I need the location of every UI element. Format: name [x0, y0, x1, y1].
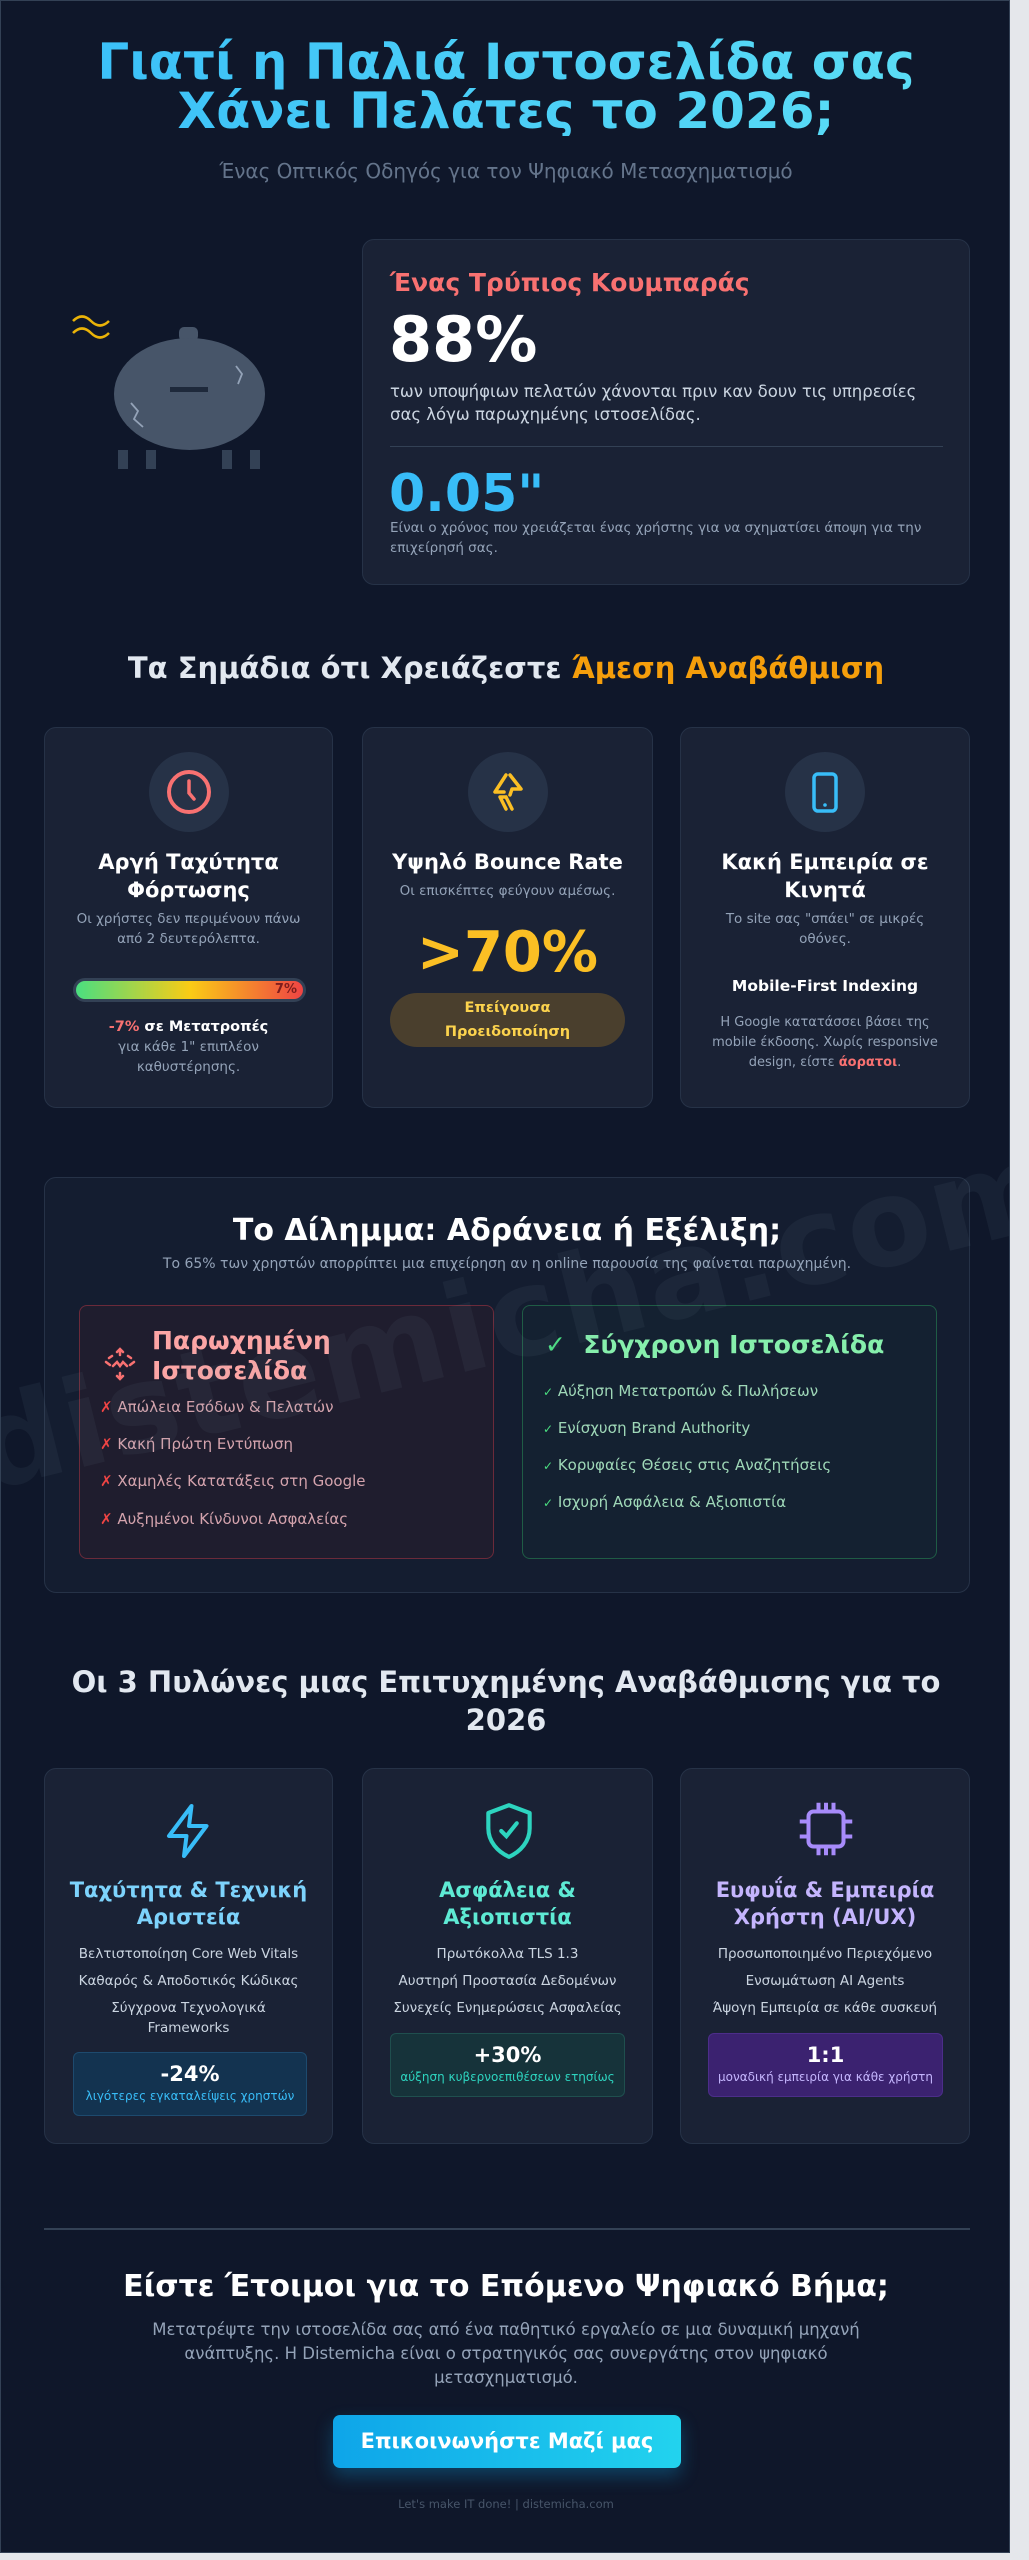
- box title: [152, 1326, 331, 1385]
- icon: phone: [785, 752, 865, 832]
- card text: Οι χρήστες δεν περιμένουν πάνω από 2 δευτερόλεπτα.: [77, 911, 300, 947]
- title: Χάνει Πελάτες το 2026;: [178, 82, 834, 140]
- card text: Το site σας "σπάει" σε μικρές οθόνες.: [726, 911, 924, 947]
- stat: 88%: 88%: [389, 303, 537, 376]
- footer: Let's make IT done! | distemicha.com: [398, 2497, 614, 2511]
- list: negatives: ✗ Χαμηλές Κατατάξεις στη Google: [100, 1472, 366, 1490]
- stat box: +30%: [390, 2033, 625, 2097]
- card title: Φόρτωσης: [127, 878, 250, 902]
- box title: Ιστοσελίδα: [152, 1356, 307, 1385]
- stat: >70%: >70%: [417, 920, 598, 985]
- panel: slow speed: [44, 727, 333, 1108]
- progress bar: 7%: [275, 982, 297, 997]
- list: positives: ✓ Ισχυρή Ασφάλεια & Αξιοπιστία: [543, 1493, 786, 1511]
- panel: security pillar: Συνεχείς Ενημερώσεις Ασφαλείας: [393, 2000, 622, 2016]
- conversion text: για κάθε 1" επιπλέον καθυστέρησης.: [118, 1039, 259, 1075]
- icon: zap: [166, 1804, 209, 1858]
- icon: broken piggy bank: [72, 315, 265, 469]
- pillar title: Αριστεία: [137, 1905, 240, 1929]
- icon: broken bolt: [468, 752, 548, 832]
- panel: AI/UX pillar: [680, 1768, 970, 2144]
- subtext: Το 65% των χρηστών απορρίπτει μια επιχείρηση αν η online παρουσία της φαίνεται παρωχημένη.: [163, 1256, 851, 1272]
- heading: pillars: Οι 3 Πυλώνες μιας Επιτυχημένης Αναβάθμισης για το 2026: [72, 1665, 940, 1737]
- panel: bounce rate: [362, 727, 653, 1108]
- title: [1, 38, 1011, 136]
- pillar title: Ευφυΐα & Εμπειρία: [716, 1878, 934, 1902]
- icon: chip: [800, 1802, 852, 1856]
- badge: urgent warning: [390, 993, 625, 1047]
- badge: urgent warning: Προειδοποίηση: [445, 1024, 570, 1040]
- pillar items: Βελτιστοποίηση Core Web Vitals: [79, 1946, 298, 1962]
- heading: CTA: Είστε Έτοιμοι για το Επόμενο Ψηφιακό Βήμα;: [123, 2269, 889, 2304]
- conversion text: [109, 1019, 268, 1075]
- heading: dilemma: Το Δίλημμα: Αδράνεια ή Εξέλιξη;: [233, 1213, 781, 1248]
- text: 0.05 description: Είναι ο χρόνος που χρειάζεται ένας χρήστης για να σχηματίσει άποψη για την επιχείρησή σας.: [390, 520, 921, 556]
- panel: AI/UX pillar: Άψογη Εμπειρία σε κάθε συσκευή: [713, 2000, 937, 2016]
- panel: mobile: [680, 727, 970, 1108]
- box: modern website: [522, 1305, 937, 1559]
- text: 88% description: των υποψήφιων πελατών χάνονται πριν καν δουν τις υπηρεσίες σας λόγω παρωχημένης ιστοσελίδας.: [390, 382, 916, 424]
- icon: clock: [148, 752, 228, 832]
- pillar items: Προσωποποιημένο Περιεχόμενο: [718, 1946, 932, 1962]
- stat box: 1:1: 1:1: [807, 2043, 844, 2067]
- list: negatives: ✗ Απώλεια Εσόδων & Πελατών: [100, 1398, 334, 1416]
- panel: dilemma: [44, 1177, 970, 1593]
- pillar title: Αξιοπιστία: [443, 1905, 572, 1929]
- stat box: -24%: λιγότερες εγκαταλείψεις χρηστών: [86, 2089, 294, 2103]
- pillar title: [439, 1878, 576, 1929]
- conversion text: -7% σε Μετατροπές: [109, 1019, 268, 1035]
- panel: hero stats: [362, 239, 970, 585]
- list: positives: ✓ Ενίσχυση Brand Authority: [543, 1419, 750, 1437]
- subheading: mobile first: Mobile-First Indexing: [732, 977, 918, 995]
- card text: Οι επισκέπτες φεύγουν αμέσως.: [400, 883, 615, 899]
- stat box: 1:1: μοναδική εμπειρία για κάθε χρήστη: [718, 2070, 933, 2084]
- box title: ✓ Σύγχρονη Ιστοσελίδα: [545, 1330, 884, 1359]
- subtitle: Ένας Οπτικός Οδηγός για τον Ψηφιακό Μετασχηματισμό: [219, 159, 793, 183]
- list: negatives: [100, 1398, 366, 1528]
- list: positives: [543, 1382, 831, 1511]
- card text: google: Η Google κατατάσσει βάσει της mobile έκδοσης. Χωρίς responsive design, είστε άορατοι.: [712, 1015, 938, 1070]
- pillar items: Πρωτόκολλα TLS 1.3: [437, 1946, 578, 1962]
- stat box: -24%: [73, 2052, 307, 2116]
- panel: security pillar: Αυστηρή Προστασία Δεδομένων: [399, 1973, 616, 1989]
- icon: broken target: [104, 1347, 136, 1381]
- list: negatives: ✗ Κακή Πρώτη Εντύπωση: [100, 1435, 293, 1453]
- card title: Αργή Ταχύτητα: [98, 850, 279, 874]
- card title: Υψηλό Bounce Rate: [392, 850, 623, 874]
- stat box: 1:1: [708, 2033, 943, 2097]
- list: positives: ✓ Κορυφαίες Θέσεις στις Αναζητήσεις: [543, 1456, 831, 1474]
- card title: Κακή Εμπειρία σε Κινητά: [721, 850, 929, 902]
- CTA button: [333, 2415, 681, 2468]
- panel: speed pillar: [44, 1768, 333, 2144]
- CTA button: Επικοινωνήστε Μαζί μας: [361, 2429, 653, 2453]
- progress bar: [73, 978, 306, 1002]
- stat: 0.05: 0.05": [389, 464, 544, 524]
- heading: signs: Τα Σημάδια ότι Χρειάζεστε Άμεση Αναβάθμιση: [128, 651, 884, 685]
- stat box: +30%: αύξηση κυβερνοεπιθέσεων ετησίως: [400, 2070, 615, 2084]
- panel: speed pillar: Καθαρός & Αποδοτικός Κώδικας: [79, 1973, 298, 1989]
- panel: AI/UX pillar: Ενσωμάτωση AI Agents: [746, 1973, 904, 1989]
- pillar title: [716, 1876, 934, 1929]
- stat box: -24%: -24%: [160, 2062, 219, 2086]
- panel: speed pillar: Σύγχρονα Τεχνολογικά Frameworks: [111, 2000, 266, 2036]
- list: negatives: ✗ Αυξημένοι Κίνδυνοι Ασφαλείας: [100, 1510, 348, 1528]
- icon: shield: [486, 1803, 532, 1859]
- pillar title: Ασφάλεια &: [439, 1878, 576, 1902]
- heading: leaky piggy: Ένας Τρύπιος Κουμπαράς: [390, 268, 750, 297]
- badge: urgent warning: Επείγουσα: [464, 1000, 550, 1016]
- title: Γιατί η Παλιά Ιστοσελίδα σας: [97, 33, 915, 91]
- box title: Παρωχημένη: [152, 1326, 331, 1355]
- stat box: +30%: +30%: [474, 2043, 541, 2067]
- box: outdated website: [79, 1305, 494, 1559]
- panel: security pillar: [362, 1768, 653, 2144]
- pillar title: Ταχύτητα & Τεχνική: [70, 1878, 307, 1902]
- pillar title: Χρήστη (AI/UX): [734, 1905, 916, 1929]
- card title: [98, 850, 279, 902]
- list: positives: ✓ Αύξηση Μετατροπών & Πωλήσεων: [543, 1382, 818, 1400]
- CTA text: Μετατρέψτε την ιστοσελίδα σας από ένα παθητικό εργαλείο σε μια δυναμική μηχανή ανάπτυξης. Η Distemicha είναι ο στρατηγικός σας συνεργάτης στον ψηφιακό μετασχηματισμό.: [152, 2320, 860, 2387]
- pillar title: [70, 1878, 307, 1929]
